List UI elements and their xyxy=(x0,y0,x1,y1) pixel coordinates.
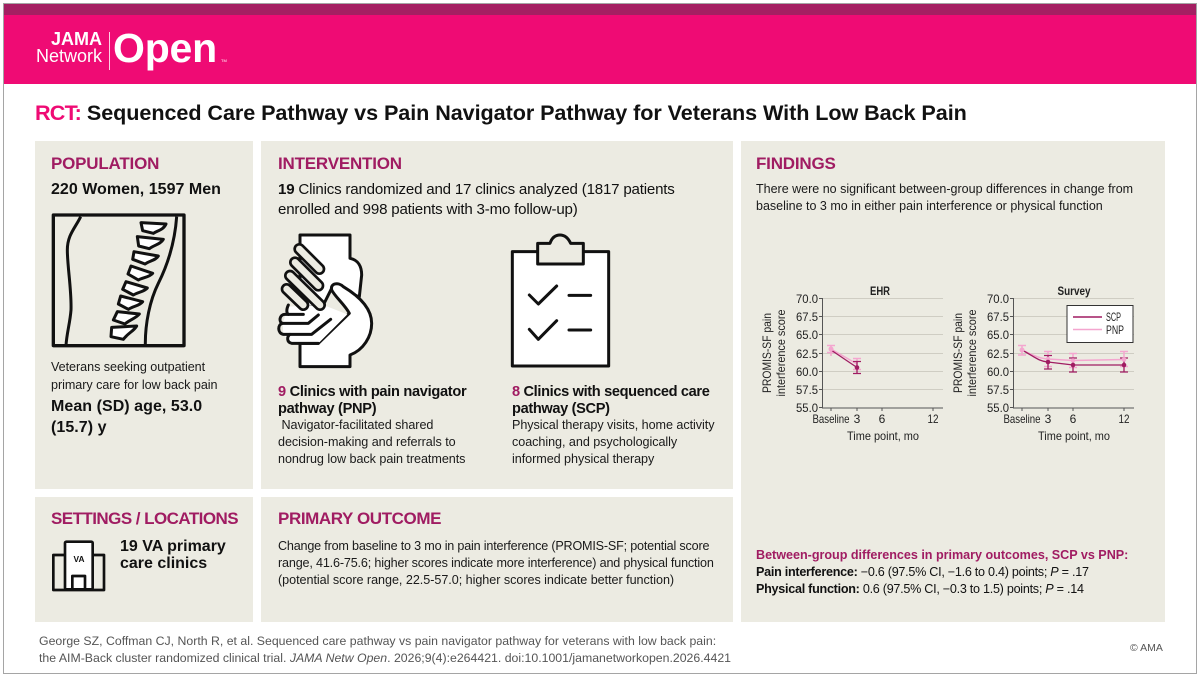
citation: George SZ, Coffman CJ, North R, et al. Sequenced care pathway vs pain navigator pathway for veterans with low back pain: xyxy=(39,634,716,648)
primary outcome description xyxy=(278,539,714,587)
heading: population: POPULATION xyxy=(51,154,159,173)
SCP heading xyxy=(512,384,710,417)
copyright: © AMA xyxy=(1130,642,1163,654)
logo: JAMA Network Open xyxy=(36,25,227,71)
population description: primary care for low back pain xyxy=(51,378,217,392)
PNP heading: pathway (PNP) xyxy=(278,401,376,417)
logo divider xyxy=(109,32,110,70)
population counts: 220 Women, 1597 Men xyxy=(51,181,221,198)
differences heading: Between-group differences in primary outcomes, SCP vs PNP: xyxy=(756,548,1128,562)
primary outcome description: Change from baseline to 3 mo in pain interference (PROMIS-SF; potential score xyxy=(278,539,709,553)
heading: intervention: INTERVENTION xyxy=(278,154,402,173)
chart: Survey xyxy=(951,284,1134,443)
chart: EHR: 12 xyxy=(928,412,939,426)
chart: Survey: 67.5 xyxy=(987,310,1009,324)
panel: findings xyxy=(741,141,1165,622)
chart: EHR xyxy=(760,284,943,443)
logo word Open: Open xyxy=(113,25,217,71)
chart: Survey: 3 xyxy=(1045,412,1052,426)
SCP description: coaching, and psychologically xyxy=(512,435,677,449)
citation: the AIM-Back cluster randomized clinical trial. JAMA Netw Open. 2026;9(4):e264421. doi:10.1001/jamanetworkopen.2026.4421 xyxy=(39,650,731,664)
mean age: Mean (SD) age, 53.0 xyxy=(51,398,202,415)
PNP description: Navigator-facilitated shared xyxy=(281,418,433,432)
chart: Survey: 55.0 xyxy=(987,401,1009,415)
between-group differences xyxy=(756,548,1128,596)
chart: EHR: EHR xyxy=(870,284,890,298)
heading: primary outcome: PRIMARY OUTCOME xyxy=(278,509,441,528)
chart: EHR: 70.0 xyxy=(796,292,818,306)
chart: Survey: 65.0 xyxy=(987,328,1009,342)
title: RCT: Sequenced Care Pathway vs Pain Navigator Pathway for Veterans With Low Back Pain xyxy=(35,100,967,125)
panel: intervention xyxy=(261,141,733,489)
findings summary: baseline to 3 mo in either pain interference or physical function xyxy=(756,199,1103,213)
intervention summary: enrolled and 998 patients with 3-mo follow-up) xyxy=(278,201,578,218)
SCP heading: 8 Clinics with sequenced care xyxy=(512,384,710,400)
header band xyxy=(4,4,1196,84)
chart: Survey: SCP xyxy=(1106,310,1121,324)
SCP arm xyxy=(512,384,714,466)
chart: EHR: 3 xyxy=(854,412,861,426)
logo word Network: Network xyxy=(36,46,102,66)
chart: Survey: Time point, mo xyxy=(1038,429,1110,443)
intervention summary: 19 Clinics randomized and 17 clinics analyzed (1817 patients xyxy=(278,181,675,198)
PNP arm xyxy=(278,384,466,466)
intervention summary xyxy=(278,181,675,218)
chart: Survey: 62.5 xyxy=(987,347,1009,361)
header top strip xyxy=(4,4,1196,15)
chart: Survey: PNP xyxy=(1106,323,1124,337)
logo word JAMA: JAMA xyxy=(51,29,102,49)
mean age xyxy=(51,398,202,436)
chart: EHR: PROMIS-SF pain xyxy=(760,313,774,393)
chart: Survey: PROMIS-SF pain xyxy=(951,313,965,393)
chart: Survey: interference score xyxy=(965,309,979,396)
chart: EHR: 57.5 xyxy=(796,383,818,397)
chart: EHR: 67.5 xyxy=(796,310,818,324)
citation xyxy=(39,634,731,664)
population description: Veterans seeking outpatient xyxy=(51,360,205,374)
heading: findings: FINDINGS xyxy=(756,154,836,173)
panel: primary outcome xyxy=(261,497,733,622)
mean age: (15.7) y xyxy=(51,419,107,436)
icon: holding hands xyxy=(277,234,374,368)
chart: EHR: Baseline xyxy=(812,412,850,426)
logo trademark: TM xyxy=(221,58,227,63)
icon: spine xyxy=(52,213,186,348)
population description xyxy=(51,360,217,392)
PNP description: decision-making and referrals to xyxy=(278,435,456,449)
PNP heading: 9 Clinics with pain navigator xyxy=(278,384,466,400)
settings text: 19 VA primary xyxy=(120,538,226,555)
chart: EHR: Time point, mo xyxy=(847,429,919,443)
chart: Survey: Survey xyxy=(1058,284,1091,298)
heading: settings: SETTINGS / LOCATIONS xyxy=(51,509,238,528)
physical function result: Physical function: 0.6 (97.5% CI, −0.3 to 1.5) points; P = .14 xyxy=(756,582,1084,596)
panel: population xyxy=(35,141,253,489)
chart: EHR: 60.0 xyxy=(796,365,818,379)
icon: clipboard checklist xyxy=(510,234,610,368)
chart: Survey: 60.0 xyxy=(987,365,1009,379)
chart: Survey: 6 xyxy=(1070,412,1077,426)
chart: EHR: interference score xyxy=(774,309,788,396)
SCP description xyxy=(512,418,714,466)
SCP heading: pathway (SCP) xyxy=(512,401,610,417)
chart: Survey: 12 xyxy=(1118,412,1130,426)
icon: VA building: VA xyxy=(74,554,84,564)
SCP description: Physical therapy visits, home activity xyxy=(512,418,714,432)
primary outcome description: range, 41.6-75.6; higher scores indicate more interference) and physical function xyxy=(278,556,714,570)
chart: Survey: 70.0 xyxy=(987,292,1009,306)
PNP description xyxy=(278,418,465,466)
findings summary: There were no significant between-group differences in change from xyxy=(756,182,1133,196)
findings summary xyxy=(756,182,1133,213)
settings text: care clinics xyxy=(120,555,207,572)
chart: EHR: 62.5 xyxy=(796,347,818,361)
SCP description: informed physical therapy xyxy=(512,452,654,466)
chart: Survey: 57.5 xyxy=(987,383,1009,397)
pain interference result: Pain interference: −0.6 (97.5% CI, −1.6 to 0.4) points; P = .17 xyxy=(756,565,1089,579)
icon: VA building xyxy=(52,540,106,592)
chart: Survey: Baseline xyxy=(1004,412,1041,426)
chart: EHR: 55.0 xyxy=(796,401,818,415)
PNP heading xyxy=(278,384,466,417)
PNP description: nondrug low back pain treatments xyxy=(278,452,465,466)
chart: EHR: 6 xyxy=(879,412,886,426)
primary outcome description: (potential score range, 22.5-57.0; higher scores indicate better function) xyxy=(278,573,674,587)
settings text xyxy=(120,538,226,572)
chart: EHR: 65.0 xyxy=(796,328,818,342)
panel: settings / locations xyxy=(35,497,253,622)
